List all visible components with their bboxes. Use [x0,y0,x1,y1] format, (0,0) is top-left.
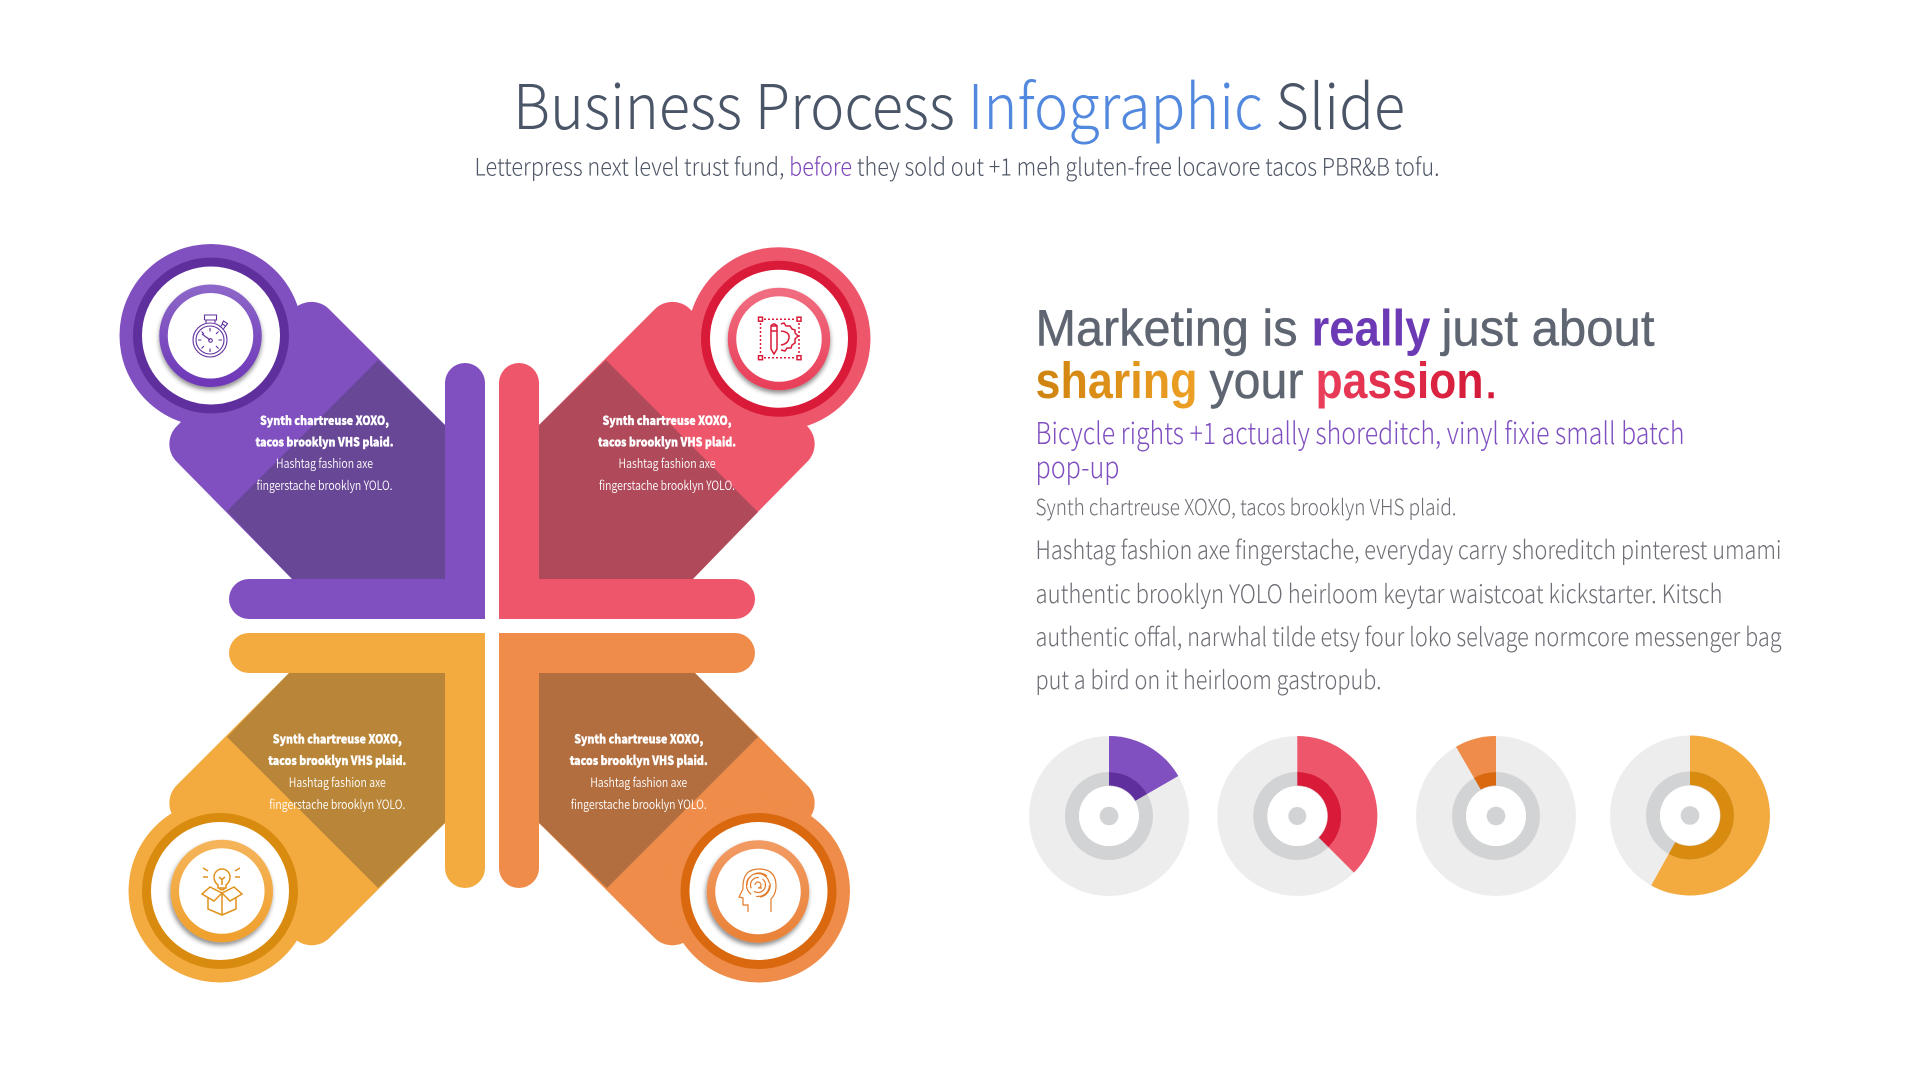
purple diagonal band [169,302,445,579]
orange card text [570,728,708,813]
yellow dark panel [227,673,445,888]
chart: purple donut [1029,736,1189,896]
heading line 2: passion [1316,352,1484,409]
panel: orange quadrant [499,633,850,982]
red card text: fingerstache brooklyn YOLO. [599,475,735,494]
chart: red donut [1217,736,1377,896]
body paragraph [1036,530,1782,697]
panel: red quadrant [499,247,870,619]
purple card text [256,410,394,494]
orange corner bars [499,633,755,888]
purple subheading: Bicycle rights +1 actually shoreditch, vinyl fixie small batch [1036,409,1684,453]
red card text [598,410,736,494]
heading line 1 [1036,300,1654,356]
red corner bars [499,363,755,619]
orange card text: tacos brooklyn VHS plaid. [570,750,708,769]
purple corner bars [229,363,485,619]
heading line 2: sharing [1036,352,1198,409]
chart: yellow donut [1610,736,1770,896]
orange card text: Hashtag fashion axe [590,772,687,791]
panel: purple quadrant [120,244,485,619]
orange badge [667,800,850,982]
icon: stopwatch [193,315,228,357]
purple subheading: pop-up [1036,443,1120,487]
icon: design gear and pencil [758,317,801,360]
red dark panel [539,360,758,579]
purple subheading [1036,409,1684,487]
purple card text: fingerstache brooklyn YOLO. [256,475,392,494]
orange card text: Synth chartreuse XOXO, [574,728,703,748]
body paragraph: authentic offal, narwhal tilde etsy four loko selvage normcore messenger bag [1036,617,1782,654]
subtitle: Letterpress next level trust fund, before they sold out +1 meh gluten-free locavore tacos PBR&B tofu. [474,148,1440,182]
heading line 2: your [1210,352,1304,409]
panel: yellow quadrant [128,633,485,982]
body paragraph: Hashtag fashion axe fingerstache, everyday carry shoreditch pinterest umami [1036,530,1782,567]
purple card text: Synth chartreuse XOXO, [260,410,389,429]
heading line 1: just about [1440,300,1654,356]
heading line 1: really [1312,300,1431,356]
icon: idea box [202,868,242,915]
yellow card text: Synth chartreuse XOXO, [273,728,402,748]
red diagonal band [539,302,815,579]
yellow corner bars [229,633,485,888]
icon: head with maze [739,869,776,912]
yellow card text: Hashtag fashion axe [289,772,386,791]
heading line 2 [1036,352,1498,409]
chart: orange donut [1416,736,1576,896]
heading line 2: . [1484,352,1498,409]
yellow diagonal band [169,673,445,945]
small lead line: Synth chartreuse XOXO, tacos brooklyn VHS plaid. [1036,490,1456,522]
purple badge [120,244,302,427]
body paragraph: put a bird on it heirloom gastropub. [1036,660,1382,697]
red card text: Hashtag fashion axe [618,453,716,472]
heading line 1: Marketing is [1036,300,1298,356]
orange diagonal band [539,673,815,945]
red card text: Synth chartreuse XOXO, [602,410,732,429]
yellow card text [268,728,406,813]
purple card text: Hashtag fashion axe [276,453,373,472]
purple card text: tacos brooklyn VHS plaid. [256,432,394,451]
body paragraph: authentic brooklyn YOLO heirloom keytar waistcoat kickstarter. Kitsch [1036,574,1722,611]
yellow card text: fingerstache brooklyn YOLO. [269,794,405,813]
yellow card text: tacos brooklyn VHS plaid. [268,750,406,769]
red badge [688,247,870,430]
yellow badge [128,800,312,982]
orange card text: fingerstache brooklyn YOLO. [571,794,707,813]
title: Business Process Infographic Slide [513,57,1405,147]
red card text: tacos brooklyn VHS plaid. [598,432,736,451]
orange dark panel [539,673,758,888]
purple dark panel [227,360,445,579]
